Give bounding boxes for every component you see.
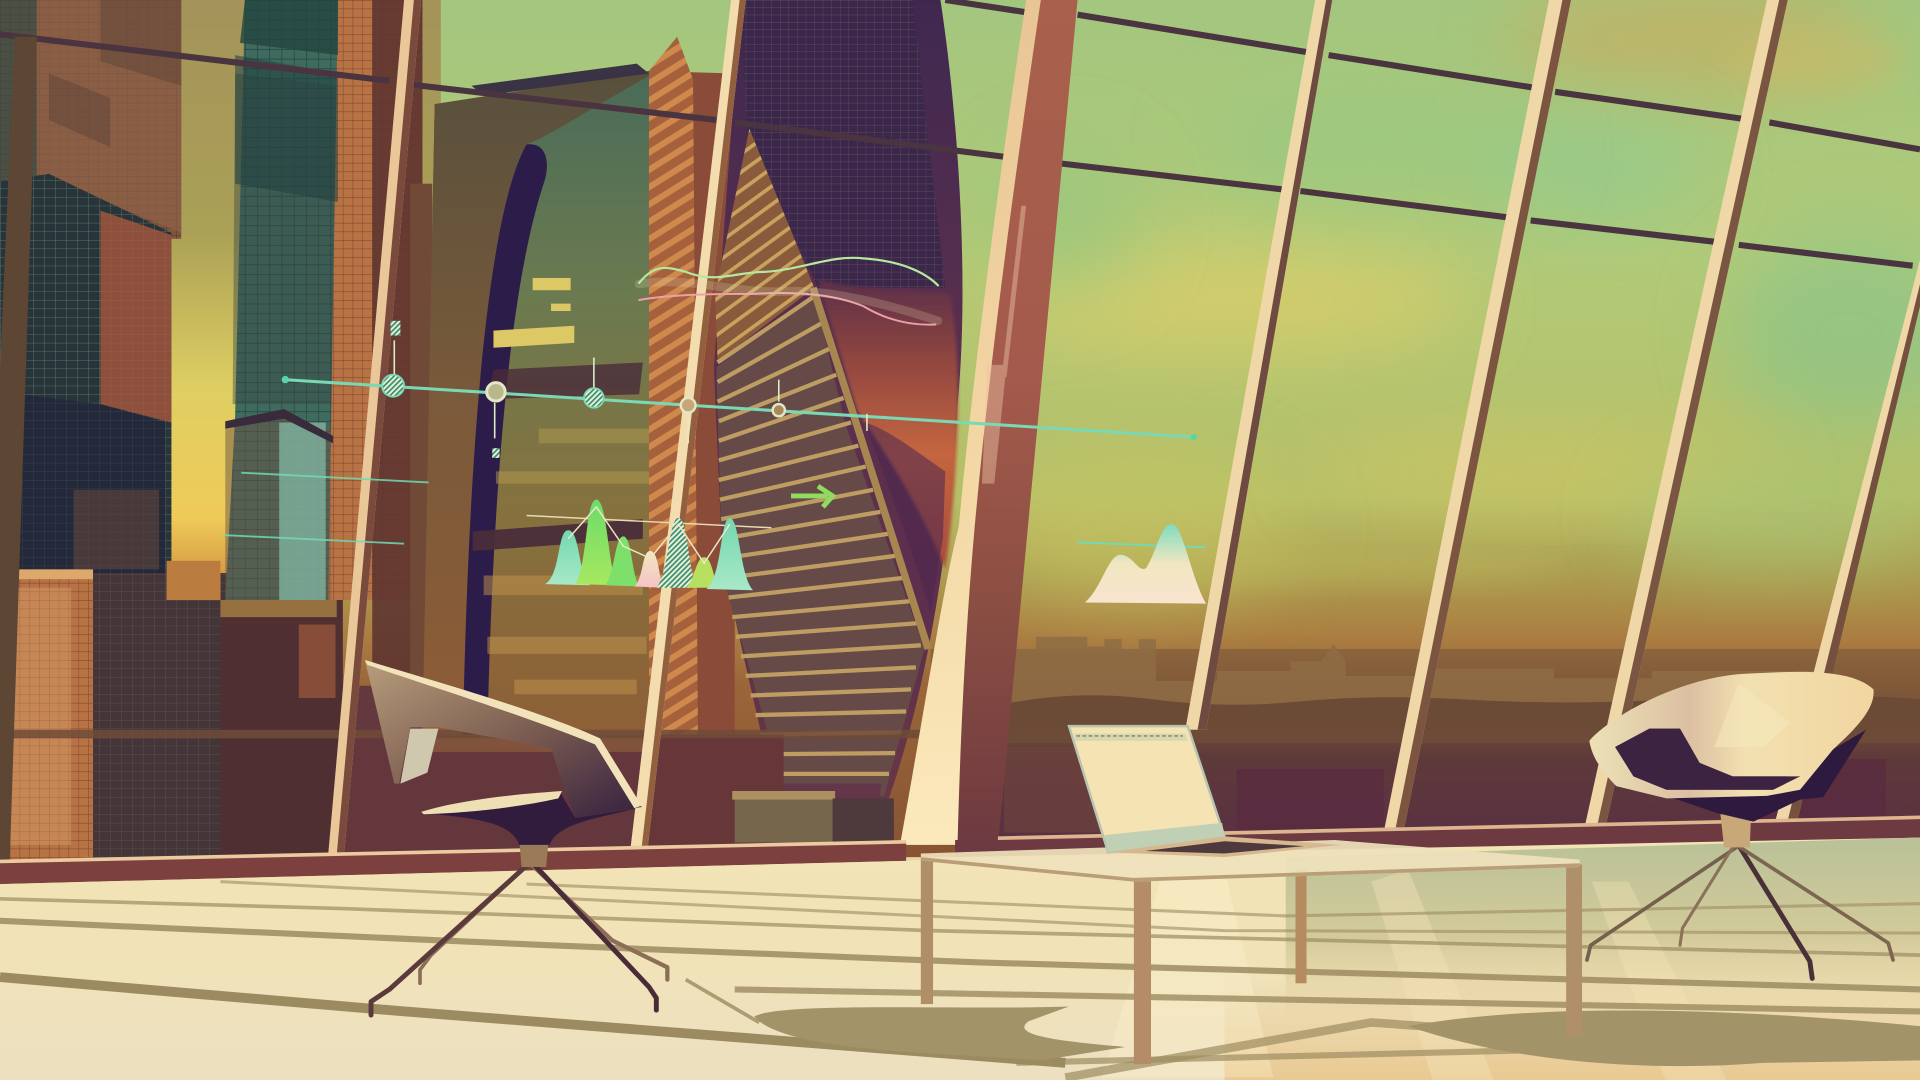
right chair (1587, 672, 1893, 978)
green arrow (791, 486, 833, 507)
glass railing (0, 730, 1920, 741)
twisted tower floor bands (718, 296, 921, 793)
holographic line chart (223, 321, 1206, 547)
window sill (0, 816, 1920, 884)
wave lines chart (639, 258, 938, 325)
left tower (0, 0, 228, 863)
chair opening (1615, 729, 1800, 790)
chair legs (1587, 847, 1893, 978)
twisted tower (714, 0, 963, 840)
table legs (921, 860, 1582, 1064)
multi-peak area chart (527, 500, 771, 590)
laptop (1069, 726, 1341, 857)
shadow of chair and table (754, 1007, 1920, 1066)
cream window mullions (328, 0, 1920, 855)
left pillar (0, 37, 37, 860)
area chart over sky (1085, 524, 1206, 604)
table top (921, 840, 1580, 882)
chart markers (382, 321, 867, 458)
table and laptop (921, 726, 1582, 1064)
chair legs (371, 866, 667, 1015)
lower buildings behind tower (647, 735, 894, 845)
arched tower (343, 37, 735, 857)
chair shell (1589, 672, 1874, 798)
left chair (365, 660, 667, 1015)
sky (0, 0, 1920, 857)
dark horizontal window mullions (0, 0, 1920, 266)
main column (900, 0, 1078, 845)
floor shadows (0, 882, 1920, 1078)
floor (0, 838, 1920, 1080)
distant city and trees (931, 637, 1920, 845)
second tower (220, 0, 435, 863)
